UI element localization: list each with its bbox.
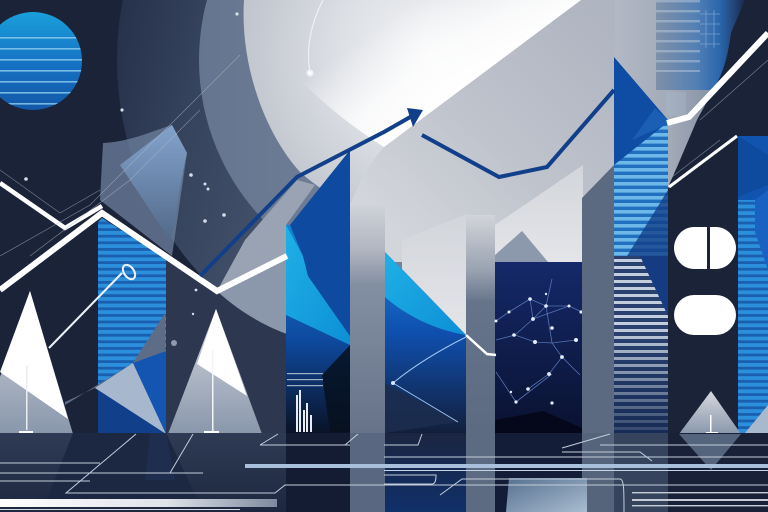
backdrop: dark circle [117, 0, 753, 378]
reflective floor [0, 433, 768, 512]
grey column 1 [350, 205, 385, 433]
column C [385, 252, 466, 433]
lower left kite [95, 351, 166, 434]
dark column F [668, 136, 737, 433]
lower grey arc wedge [219, 256, 287, 334]
right bottom stripes [632, 492, 768, 506]
white pointer with ring [49, 263, 138, 348]
backdrop: right grey area [610, 0, 745, 265]
striped column A [98, 218, 166, 432]
light block on floor [506, 478, 587, 512]
white zigzag trend line, left [0, 213, 287, 291]
white zigzag upper line [0, 183, 102, 228]
blue descending and rising line [422, 90, 614, 177]
blue striped sphere [0, 12, 82, 110]
backdrop: grey ring [199, 0, 661, 291]
icon: split pill [674, 227, 736, 269]
light wedge under blue line [217, 180, 315, 291]
mini bar chart with dotted grid [287, 373, 323, 432]
white zigzag trend line, right [667, 33, 768, 123]
dark top right corner [669, 0, 768, 512]
blue rising line with arrow [200, 108, 423, 276]
column B [286, 150, 350, 433]
scattered dots [24, 12, 239, 346]
small sail [679, 391, 741, 434]
backdrop: large light disc [244, 0, 615, 262]
backdrop: grey area beneath the beam [350, 0, 615, 262]
light beam [300, 0, 581, 147]
column divider band [166, 256, 287, 433]
small grey peak [495, 231, 548, 262]
grey column 2 [466, 215, 495, 433]
icon: rounded pill [674, 295, 736, 335]
white band at bottom left [0, 499, 277, 510]
light panel above column C [402, 214, 466, 335]
translucent kite shape [100, 125, 187, 256]
thin white lines [0, 55, 768, 256]
grey wedge behind lower kite [65, 313, 165, 405]
floor lines [0, 434, 768, 512]
short white connector [466, 335, 496, 355]
column G [738, 136, 768, 433]
grey column 3 [582, 165, 614, 433]
horizontal light band on floor [245, 464, 768, 471]
light panel behind network column [495, 165, 583, 262]
white roof line [669, 136, 737, 187]
top right gridded tower [656, 0, 745, 116]
column E [614, 57, 668, 433]
centre white sail [168, 309, 262, 434]
network column D [494, 262, 583, 433]
thin orbit line with node [307, 0, 323, 76]
left white sail [0, 291, 73, 434]
